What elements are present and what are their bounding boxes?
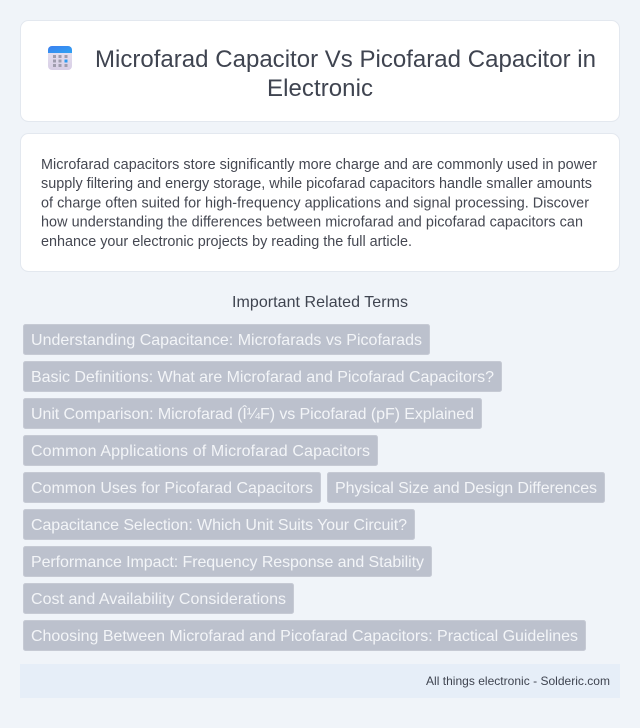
tag: Physical Size and Design Differences — [335, 480, 597, 497]
tag — [24, 620, 586, 650]
tag: Capacitance Selection: Which Unit Suits Your Circuit? — [31, 517, 407, 534]
tag: Common Applications of Microfarad Capacitors — [31, 443, 370, 460]
intro paragraph: supply filtering and energy storage, while picofarad capacitors handle smaller amounts — [41, 176, 592, 192]
tag: Basic Definitions: What are Microfarad and Picofarad Capacitors? — [31, 369, 494, 386]
tag — [24, 398, 482, 428]
tag: Choosing Between Microfarad and Picofarad Capacitors: Practical Guidelines — [31, 628, 578, 645]
intro paragraph: Microfarad capacitors store significantly more charge and are commonly used in power — [41, 157, 597, 173]
intro paragraph: of charge often suited for high-frequency applications and signal processing. Discover — [41, 196, 589, 212]
tag: Understanding Capacitance: Microfarads vs Picofarads — [31, 332, 422, 349]
tag: Unit Comparison: Microfarad (Î¼F) vs Picofarad (pF) Explained — [31, 404, 474, 423]
title — [95, 46, 596, 102]
tag — [24, 324, 430, 354]
title: Electronic — [267, 75, 373, 102]
tag — [328, 472, 604, 502]
intro paragraph — [41, 157, 597, 250]
footer credit: All things electronic - Solderic.com — [426, 674, 610, 688]
tag — [24, 546, 432, 576]
footer bar — [20, 664, 620, 698]
intro paragraph: enhance your electronic projects by reading the full article. — [41, 234, 412, 250]
section heading: Important Related Terms — [232, 294, 408, 311]
tag: Cost and Availability Considerations — [31, 591, 286, 608]
tag — [24, 436, 378, 466]
title: Microfarad Capacitor Vs Picofarad Capacitor in — [95, 46, 596, 73]
related terms tags — [24, 324, 604, 650]
tag — [24, 472, 320, 502]
header panel — [20, 20, 620, 122]
tag: Common Uses for Picofarad Capacitors — [31, 480, 313, 497]
tag — [24, 510, 414, 540]
intro paragraph: how understanding the differences between microfarad and picofarad capacitors can — [41, 214, 583, 230]
icon: calendar — [48, 46, 72, 70]
tag: Performance Impact: Frequency Response and Stability — [31, 554, 424, 571]
intro text panel — [20, 134, 620, 272]
tag — [24, 584, 294, 614]
tag — [24, 362, 502, 392]
